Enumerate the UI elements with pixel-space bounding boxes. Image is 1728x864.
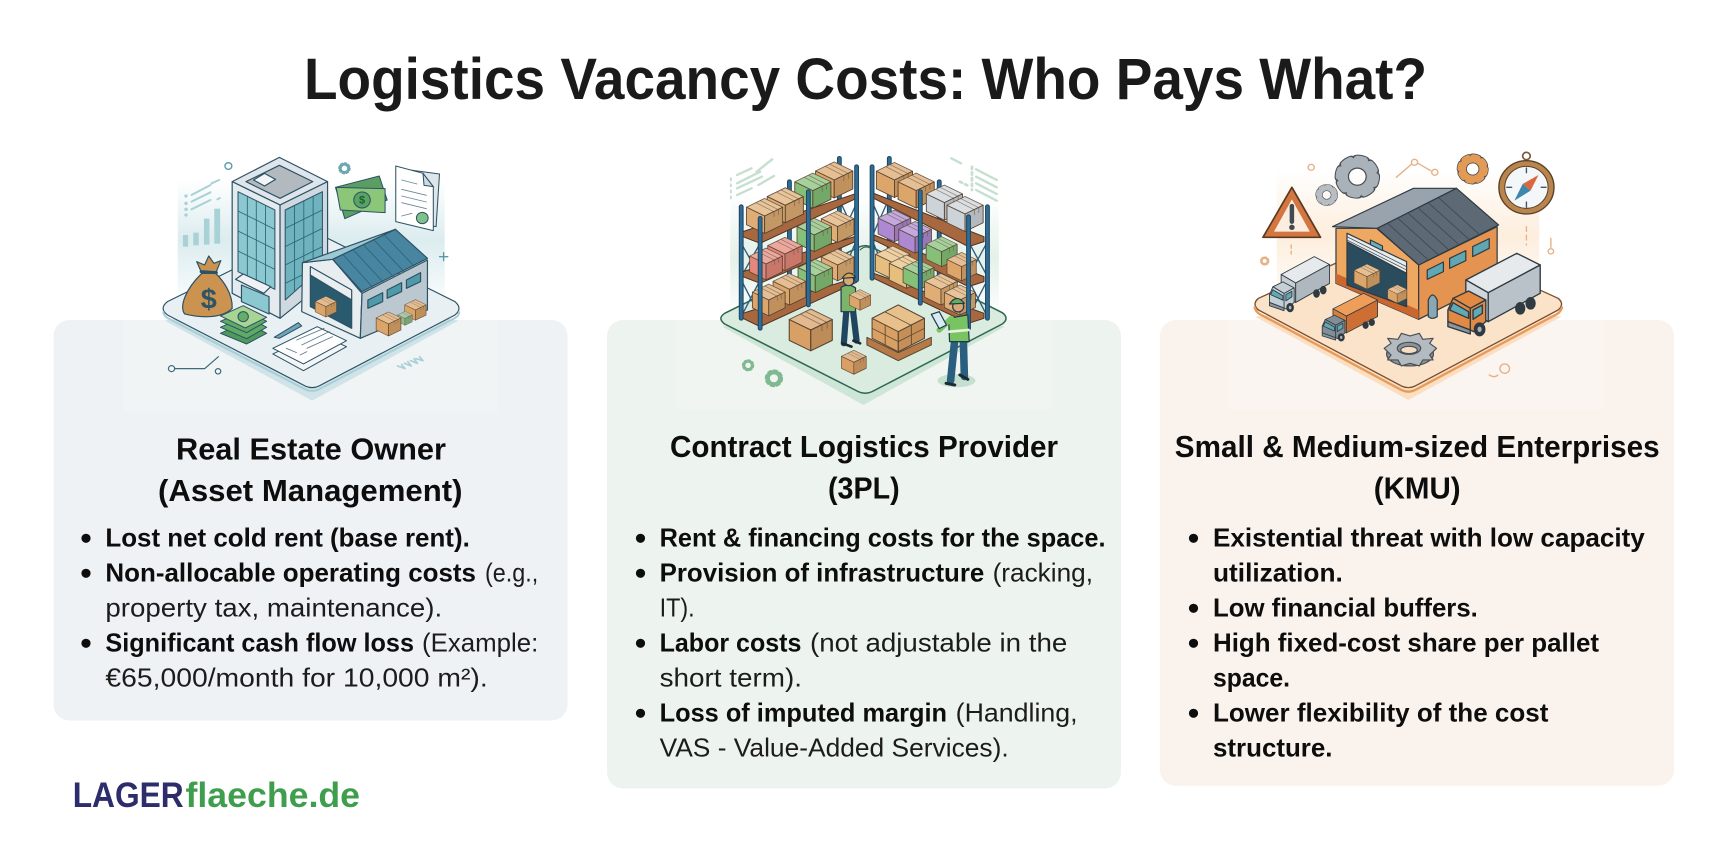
money bag: $: [201, 284, 217, 315]
bullet list: SME costs: [1189, 523, 1645, 763]
bullet list: real estate owner costs: Lost net cold rent (base rent).: [105, 523, 470, 553]
gears: [1339, 159, 1375, 194]
bullet list: 3PL costs: Loss of imputed margin: [660, 698, 947, 728]
money bag: [183, 256, 232, 317]
bullet list: 3PL costs: Rent & financing costs for the space.: [660, 523, 1106, 553]
heading: real estate owner: Real Estate Owner: [176, 432, 446, 466]
trucks: [1270, 257, 1330, 312]
decorative chart and marks: [183, 180, 220, 247]
panel: small and medium-sized enterprises: [1160, 137, 1674, 786]
pen and papers: [273, 323, 347, 371]
bullet list: 3PL costs: (racking,: [993, 558, 1093, 588]
bullet list: 3PL costs: Provision of infrastructure: [660, 558, 984, 588]
logo: LAGERflaeche.de: [73, 775, 360, 815]
heading: contract logistics provider: [670, 430, 1058, 506]
bullet list: real estate owner costs: property tax, maintenance).: [105, 593, 442, 623]
bullet list: real estate owner costs: €65,000/month for 10,000 m²).: [105, 663, 488, 693]
warehouse: [302, 229, 427, 338]
heading: real estate owner: (Asset Management): [158, 474, 462, 508]
gears and decorative lines: [743, 360, 753, 370]
bullet list: SME costs: Low financial buffers.: [1213, 593, 1478, 623]
bullet list: real estate owner costs: Significant cash flow loss: [105, 628, 414, 658]
bullet list: real estate owner costs: Non-allocable operating costs: [105, 558, 476, 588]
bullet list: SME costs: space.: [1213, 663, 1290, 693]
logo: LAGERflaeche.de: LAGER: [73, 775, 184, 815]
bullet list: 3PL costs: (not adjustable in the: [810, 628, 1067, 658]
bullet list: 3PL costs: (Handling,: [956, 698, 1078, 728]
bullet list: SME costs: Existential threat with low capacity: [1213, 523, 1645, 553]
flat gear on platform: [1384, 333, 1437, 366]
bullet list: 3PL costs: IT).: [660, 593, 695, 623]
logo: LAGERflaeche.de: flaeche.de: [186, 775, 360, 815]
heading: small and medium-sized enterprises: [1175, 430, 1660, 506]
compass: [1499, 152, 1554, 214]
illustration: warehouse with trucks: [1229, 137, 1605, 409]
dollar bills: [335, 176, 387, 219]
worker with tablet: [938, 374, 975, 387]
heading: contract logistics provider: (3PL): [828, 472, 900, 506]
bullet list: 3PL costs: short term).: [660, 663, 802, 693]
heading: small and medium-sized enterprises: (KMU): [1374, 472, 1461, 506]
decorative marks: [1291, 159, 1554, 377]
gas bottle: [1428, 295, 1437, 318]
panel: contract logistics provider: [607, 137, 1121, 788]
right rack shelves and boxes: [874, 193, 984, 323]
bullet list: 3PL costs: VAS - Value-Added Services).: [660, 733, 1009, 763]
bullet list: 3PL costs: [636, 523, 1106, 763]
bullet list: SME costs: structure.: [1213, 733, 1332, 763]
bullet list: real estate owner costs: (e.g.,: [485, 558, 538, 588]
building tower: [232, 157, 328, 318]
pallet: [867, 305, 931, 361]
illustration: warehouse racking and workers: [676, 137, 1052, 409]
illustration: office tower and warehouse: [123, 137, 498, 412]
warning triangle: [1263, 187, 1320, 237]
bullet list: real estate owner costs: (Example:: [422, 628, 538, 658]
heading: small and medium-sized enterprises: Small & Medium-sized Enterprises: [1175, 430, 1660, 464]
bullet list: 3PL costs: Labor costs: [660, 628, 801, 658]
bullet list: SME costs: Lower flexibility of the cost: [1213, 698, 1549, 728]
bullet list: SME costs: utilization.: [1213, 558, 1343, 588]
left rack shelves and boxes: [743, 193, 857, 327]
worker with box: [841, 273, 860, 347]
warehouse building: [1333, 188, 1499, 319]
bullet list: real estate owner costs: [81, 523, 538, 693]
panel: real estate owner: [54, 137, 568, 720]
boxes on floor: [789, 309, 832, 351]
cash stack: [220, 306, 267, 344]
bullet list: SME costs: High fixed-cost share per pallet: [1213, 628, 1599, 658]
contract document: [396, 166, 440, 231]
heading: contract logistics provider: Contract Logistics Provider: [670, 430, 1058, 464]
heading: real estate owner: [158, 432, 462, 508]
dollar bills: $: [359, 195, 365, 207]
racks: [789, 158, 939, 290]
title: Logistics Vacancy Costs: Who Pays What?: [304, 47, 1427, 112]
